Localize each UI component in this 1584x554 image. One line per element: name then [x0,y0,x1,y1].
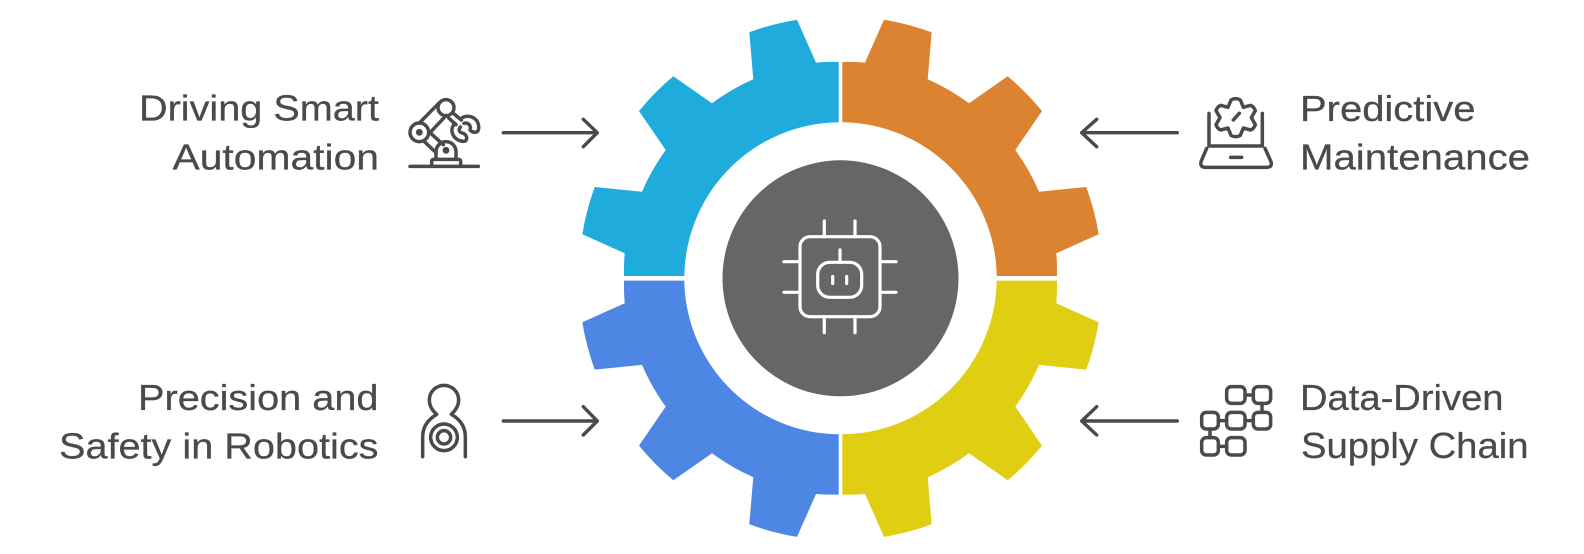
label: Data-Driven Supply Chain: Data-Driven [1300,377,1504,418]
label: Predictive Maintenance: Maintenance [1300,137,1530,178]
gear segment: bottom right yellow [842,281,1099,537]
icon: person with target [423,385,465,457]
icon: connected data blocks [1202,387,1271,455]
label: Driving Smart Automation [139,88,379,177]
arrow: top right pointing left [1082,119,1177,147]
arrow: top left pointing right [503,119,597,147]
gear segment: top right orange [842,20,1099,276]
label: Precision and Safety in Robotics [59,377,378,466]
gear: four coloured segments [582,20,1099,537]
label: Predictive Maintenance: Predictive [1300,88,1476,129]
label: Predictive Maintenance [1300,88,1530,178]
centre hub circle [722,160,958,396]
gear segment: bottom left royal blue [582,281,839,537]
label: Driving Smart Automation: Driving Smart [139,88,379,129]
gear segment: top left blue [582,20,839,276]
icon: AI chip robot [784,221,896,333]
arrow: bottom left pointing right [503,407,597,435]
label: Driving Smart Automation: Automation [172,136,379,177]
label: Data-Driven Supply Chain [1300,377,1528,466]
label: Precision and Safety in Robotics: Precision and [138,377,378,418]
icon: robot arm [410,100,479,166]
icon: laptop with gear [1201,99,1271,167]
label: Precision and Safety in Robotics: Safety in Robotics [59,425,378,466]
arrow: bottom right pointing left [1082,407,1177,435]
label: Data-Driven Supply Chain: Supply Chain [1301,425,1528,466]
